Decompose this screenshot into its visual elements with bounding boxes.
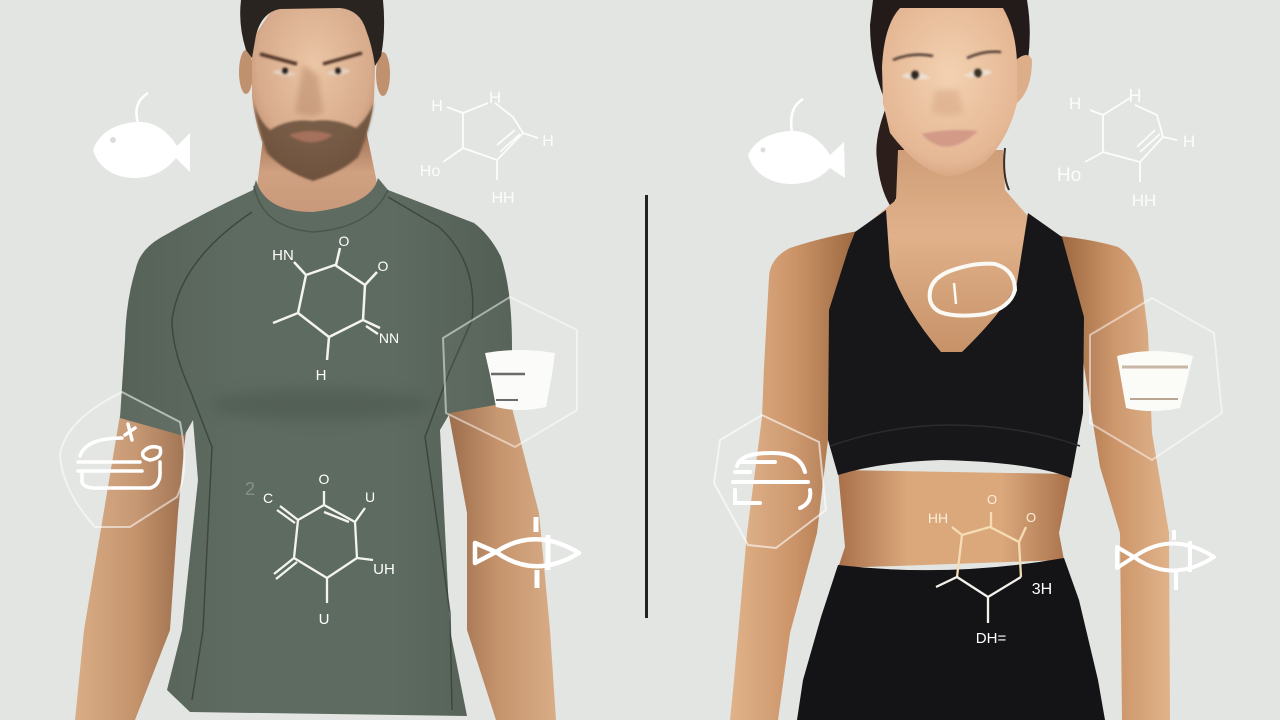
- icon: solid fish top left man: [93, 93, 190, 178]
- molecule: man chest: O: [378, 258, 389, 274]
- molecule: man abdomen: C: [263, 490, 273, 506]
- woman mouth: [922, 130, 978, 147]
- molecule: woman upper right: H: [1128, 86, 1142, 106]
- man left ear: [239, 50, 253, 94]
- molecule: man chest: NN: [379, 330, 399, 346]
- molecule: man chest: O: [339, 233, 350, 249]
- center divider: [645, 195, 648, 618]
- molecule: man abdomen: 2: [245, 479, 255, 499]
- molecule: woman upper right: HH: [1132, 191, 1156, 210]
- man left eye: [272, 68, 296, 76]
- icon: cup on woman: [1117, 351, 1193, 411]
- man nose: [295, 65, 323, 116]
- man eyebrows: [260, 53, 362, 64]
- icon: fish on man arm: [475, 517, 579, 588]
- woman left eye: [901, 70, 931, 80]
- molecule: woman abdomen: DH=: [976, 630, 1006, 647]
- molecule: man abdomen: U: [365, 489, 375, 505]
- woman leggings: [797, 558, 1105, 720]
- molecule: woman upper right: [1057, 86, 1195, 210]
- man shirt: [120, 178, 512, 716]
- molecule: woman upper right: Ho: [1057, 165, 1081, 186]
- molecule: woman abdomen: HH: [928, 510, 948, 526]
- icon: cup on man: [485, 350, 555, 410]
- molecule: woman abdomen: O: [1026, 510, 1036, 525]
- woman hair strand: [1004, 148, 1009, 190]
- molecule: man chest: [272, 233, 399, 384]
- hexagon: man left: [60, 392, 184, 527]
- molecule: man upper right: Ho: [420, 163, 440, 180]
- molecule: woman upper right: H: [1069, 94, 1081, 113]
- molecule: man upper right: [420, 88, 554, 207]
- molecule: woman upper right: H: [1183, 132, 1195, 151]
- man neck: [256, 130, 385, 215]
- man beard: [253, 100, 374, 181]
- molecule: woman abdomen: O: [987, 492, 997, 507]
- hexagon: woman left: [714, 415, 826, 548]
- icon: fish on woman arm: [1117, 530, 1214, 590]
- molecule: man abdomen: U: [319, 611, 329, 628]
- woman left arm: [730, 231, 858, 720]
- woman neck and chest: [845, 150, 1075, 365]
- man hair: [240, 0, 384, 66]
- woman nose: [931, 90, 964, 116]
- molecule: man abdomen: UH: [373, 561, 395, 578]
- icon: egg outline on woman chest: [930, 264, 1015, 316]
- woman sports bra: [828, 210, 1084, 478]
- woman right eye: [964, 68, 993, 78]
- man head: [239, 0, 390, 181]
- icon: solid fish top left woman: [748, 99, 845, 184]
- molecule: man chest: H: [316, 367, 326, 384]
- man right ear: [376, 52, 390, 96]
- woman head: [870, 0, 1032, 190]
- icon: burger on man: [78, 424, 161, 488]
- man right arm: [448, 400, 556, 720]
- man right eye: [326, 68, 351, 75]
- hexagon: man right: [443, 297, 577, 447]
- hexagon: woman right: [1090, 298, 1222, 460]
- molecule: man abdomen: O: [319, 471, 330, 487]
- molecule: man upper right: H: [542, 133, 554, 150]
- woman ponytail: [876, 110, 909, 207]
- molecule: man upper right: HH: [491, 190, 515, 207]
- man left arm: [75, 415, 186, 720]
- man mouth: [289, 131, 333, 142]
- molecule: man upper right: H: [431, 98, 443, 115]
- molecule: man chest: HN: [272, 247, 294, 264]
- man figure: [75, 0, 556, 720]
- woman right arm: [1060, 236, 1170, 720]
- woman midriff: [838, 470, 1071, 568]
- molecule: man abdomen: [245, 471, 395, 628]
- woman figure: [730, 0, 1170, 720]
- icon: burger on woman: [733, 453, 810, 508]
- woman eyebrows: [893, 52, 1001, 60]
- molecule: man upper right: H: [489, 88, 501, 107]
- woman ear: [1016, 55, 1032, 103]
- molecule: woman abdomen: 3H: [1032, 581, 1052, 598]
- molecule: woman abdomen: [928, 492, 1052, 647]
